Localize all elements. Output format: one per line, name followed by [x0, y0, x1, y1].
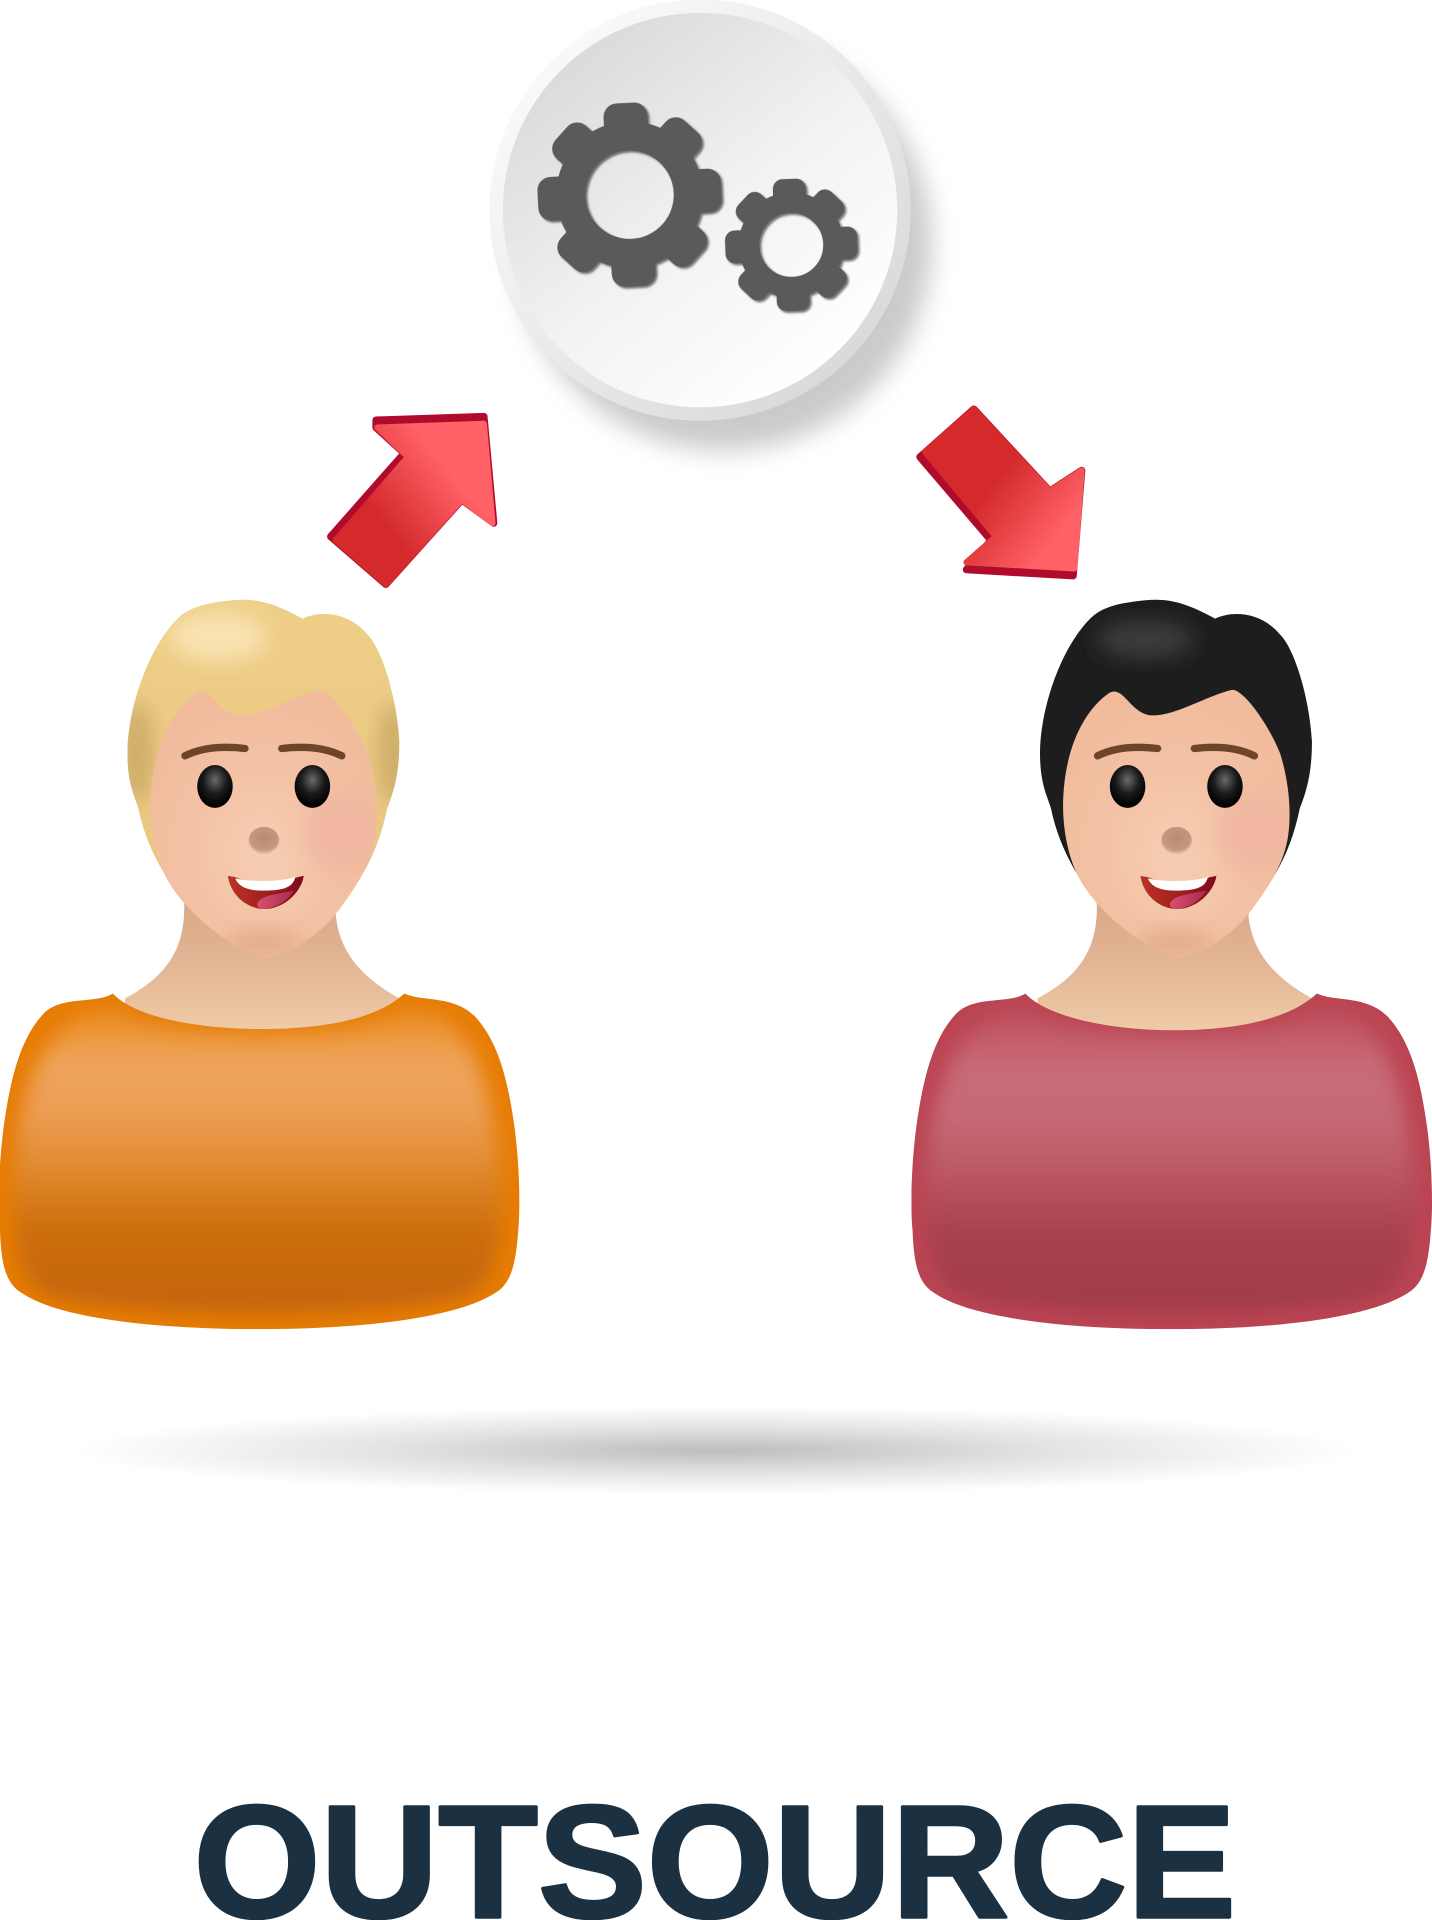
hair — [127, 600, 400, 878]
eyes — [197, 765, 330, 808]
eyebrows — [1098, 747, 1254, 756]
nose — [249, 827, 279, 854]
mouth — [1140, 876, 1216, 909]
disc with gears — [489, 0, 932, 451]
ground shadow — [73, 1406, 1360, 1495]
neck — [1038, 894, 1312, 1036]
shirt — [906, 980, 1432, 1341]
icon: large gear — [533, 98, 726, 291]
person: dark-haired man in red shirt — [906, 600, 1432, 1341]
neck — [125, 894, 399, 1036]
icon: small gear — [723, 177, 860, 313]
disc drop shadow — [516, 34, 932, 451]
disc face — [503, 13, 897, 407]
eyes — [1110, 765, 1243, 808]
person: blond man in orange shirt — [0, 594, 533, 1341]
arrow: left person up to disc — [331, 417, 494, 584]
hair — [1040, 600, 1312, 884]
disc rim — [489, 0, 911, 421]
hair highlight — [1096, 620, 1194, 659]
arrow: disc down to right person — [920, 409, 1082, 576]
nose — [1161, 827, 1192, 854]
face — [145, 680, 383, 962]
face — [1057, 680, 1296, 962]
shirt — [0, 980, 533, 1341]
eyebrows — [185, 747, 342, 756]
mouth — [228, 876, 304, 909]
